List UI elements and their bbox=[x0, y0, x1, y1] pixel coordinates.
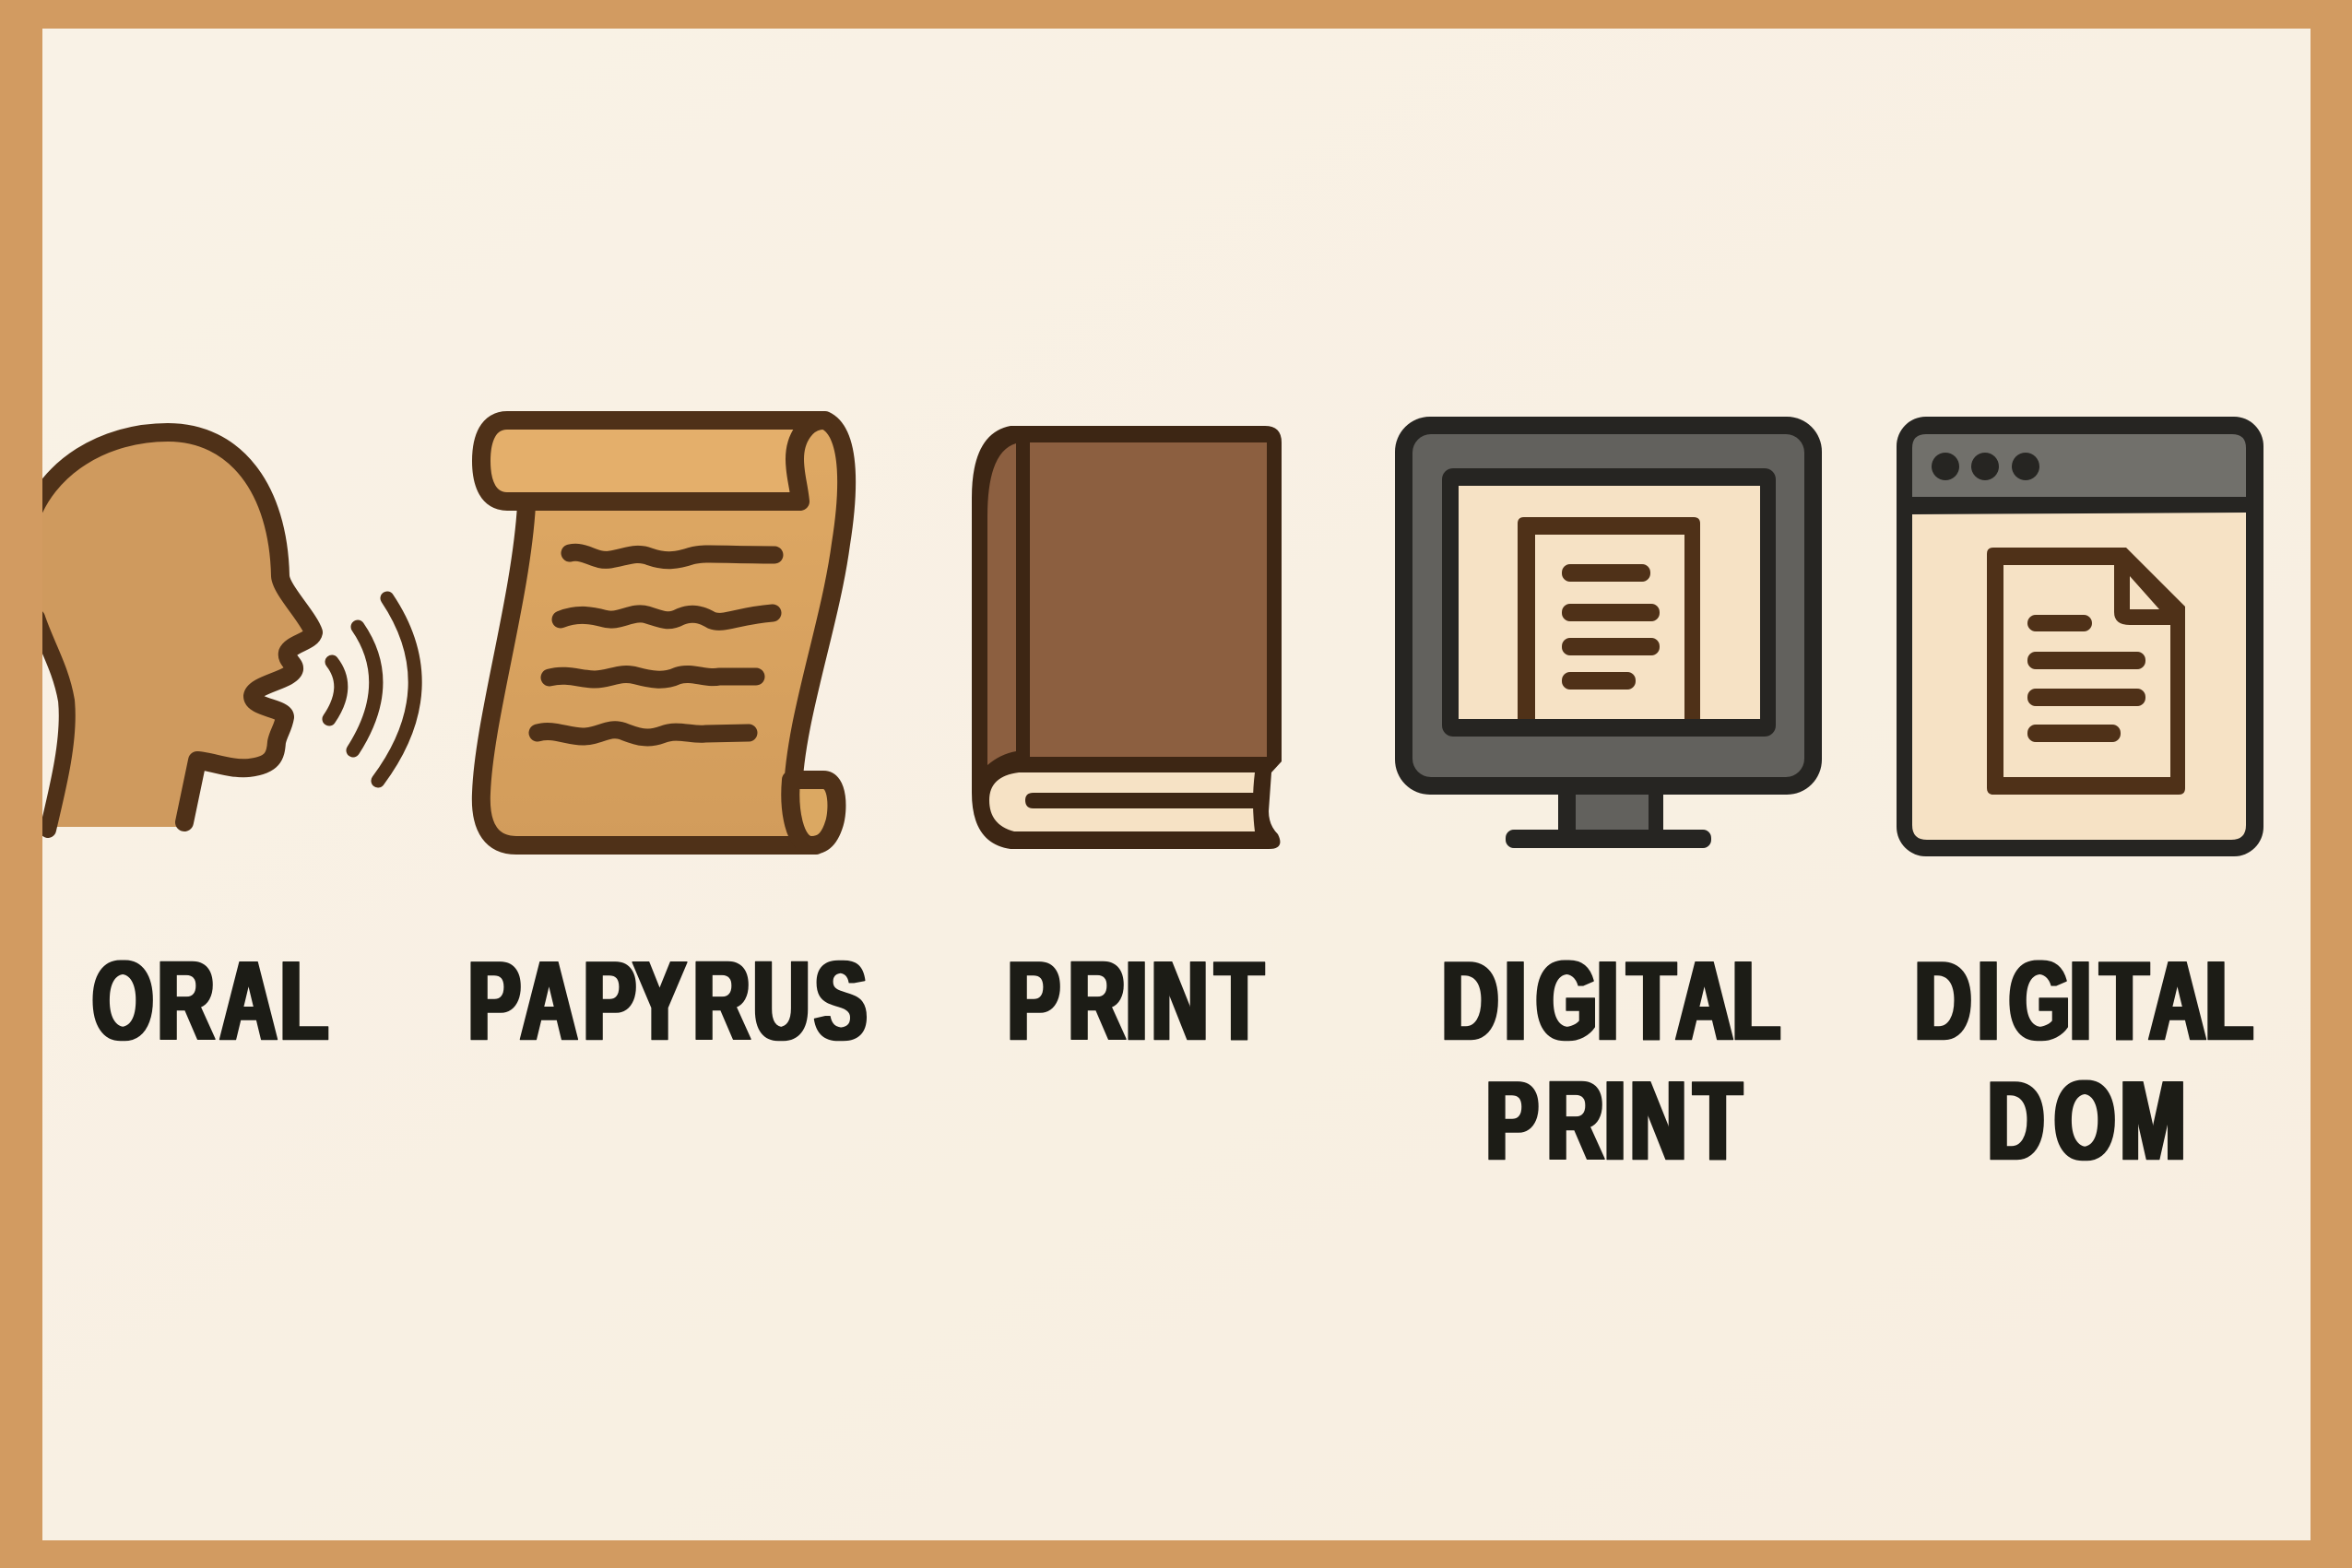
icon: speaking head bbox=[28, 432, 415, 830]
label: PRINT: PRINT bbox=[1008, 939, 1263, 1064]
book spine bbox=[987, 443, 1016, 765]
label: DIGITAL DOM: DOM bbox=[1988, 1059, 2186, 1184]
icon: desktop monitor with document bbox=[1395, 417, 1822, 848]
page document bbox=[1987, 548, 2185, 795]
monitor base bbox=[1506, 830, 1711, 848]
icon: browser window with document bbox=[1897, 417, 2263, 856]
scroll bottom curl bbox=[790, 780, 836, 845]
label: DIGITAL PRINT bbox=[1442, 939, 1780, 1184]
label: DIGITAL DOM: DIGITAL bbox=[1915, 939, 2253, 1064]
scroll text lines bbox=[538, 552, 774, 737]
browser content area bbox=[1912, 513, 2246, 840]
label: DIGITAL PRINT: PRINT bbox=[1486, 1059, 1742, 1184]
label: DIGITAL DOM bbox=[1915, 939, 2253, 1184]
browser frame bbox=[1897, 417, 2263, 856]
page lines bbox=[2027, 615, 2145, 742]
document lines bbox=[1562, 564, 1660, 690]
browser window dots bbox=[1932, 453, 2039, 480]
label: PAPYRUS: PAPYRUS bbox=[468, 939, 867, 1064]
label: ORAL: ORAL bbox=[92, 939, 328, 1064]
monitor stand bbox=[1558, 788, 1663, 834]
icon: closed book bbox=[972, 426, 1282, 849]
monitor screen bbox=[1442, 468, 1776, 737]
book cover bbox=[1030, 442, 1267, 757]
browser title bar bbox=[1912, 434, 2246, 497]
label: DIGITAL PRINT: DIGITAL bbox=[1442, 939, 1780, 1064]
monitor casing bbox=[1395, 417, 1822, 795]
book pages bbox=[989, 772, 1255, 831]
document on screen bbox=[1518, 517, 1700, 719]
scroll top roller bbox=[481, 420, 823, 501]
book page line bbox=[1025, 793, 1255, 808]
icon: papyrus scroll bbox=[481, 420, 846, 845]
icon: sound waves bbox=[329, 598, 415, 781]
